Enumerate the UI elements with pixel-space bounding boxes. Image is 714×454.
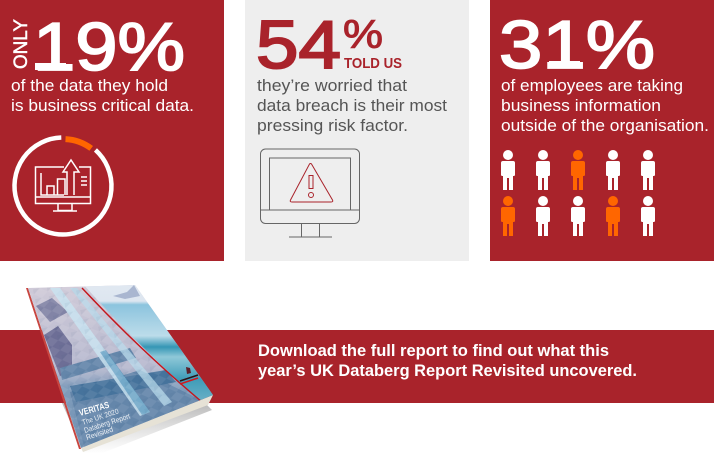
stat: 54: 54 [256,7,341,83]
pictogram: ten people, three highlighted [501,150,655,236]
text: description [11,76,194,115]
text: description: of employees are taking [501,76,683,95]
text: download message [258,342,637,380]
text: description: pressing risk factor. [257,116,408,135]
text: description [257,76,447,135]
text: description: outside of the organisation. [501,116,709,135]
text: description: is business critical data. [11,96,194,115]
text: description [501,76,709,135]
text: description: data breach is their most [257,96,447,115]
stat: 31%: 31% [499,7,655,83]
cover title text [78,400,132,442]
cover title text: VERITAS [78,400,110,418]
panel: 19% business critical data [0,0,224,261]
cover title text: The UK 2020 [81,407,120,427]
text: download message: year’s UK Databerg Report Revisited uncovered. [258,362,637,380]
text: download message: Download the full report to find out what this [258,342,609,360]
text: description: they’re worried that [257,76,407,95]
text: description: business information [501,96,661,115]
stat: 19%: 19% [33,9,185,85]
cover title text: Databerg Report [83,411,132,435]
panel: 54% told us [245,0,469,261]
icon: progress ring with chart monitor [14,138,111,235]
stat: percent sign: % [343,13,383,57]
cover title text: Revisited [85,425,114,442]
icon: monitor with warning triangle [260,149,360,237]
banner: download call to action [0,330,714,403]
panel: 31% of employees [490,0,714,261]
label: told us: TOLD US [344,55,402,72]
report cover: Databerg Report Revisited brochure [26,285,213,452]
text: description: of the data they hold [11,76,168,95]
label: only: ONLY [11,19,32,69]
